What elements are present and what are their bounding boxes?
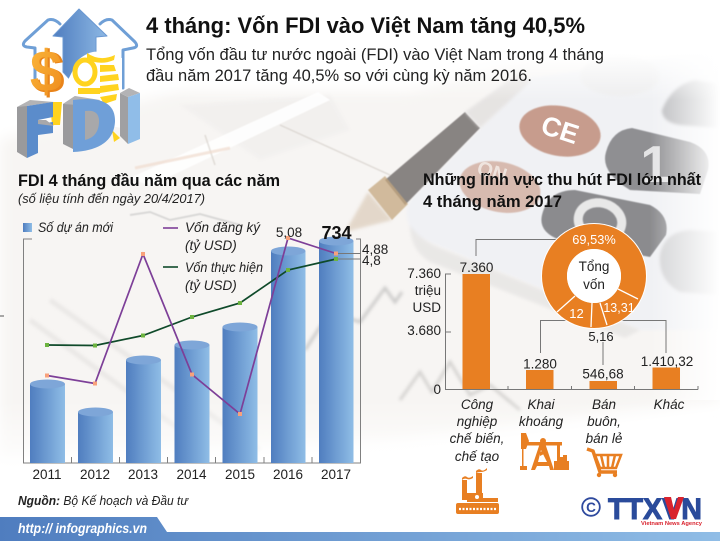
icon: F letter	[17, 100, 54, 158]
x axis labels: 2013	[128, 467, 158, 482]
background photo: calculator, pen and papers: CE	[538, 110, 582, 150]
x axis labels: 2017	[321, 467, 351, 482]
bars	[462, 274, 680, 389]
data labels: 734	[321, 223, 352, 243]
legend: registered capital: (tỷ USD)	[185, 238, 237, 253]
connector lines to end labels	[336, 254, 361, 259]
icon: FDI logo	[17, 9, 140, 158]
legend: registered capital: Vốn đăng ký	[185, 220, 261, 235]
icon: shopping cart	[587, 449, 621, 477]
bar value labels	[460, 260, 693, 382]
donut label: 69,53%: 69,53%	[572, 232, 616, 247]
soft fades	[650, 50, 720, 400]
icon: D letter	[63, 96, 115, 152]
category label: manufacturing: nghiệp	[457, 414, 498, 429]
footer URL: http:// infographics.vn	[18, 521, 147, 536]
icon: oil pump	[520, 433, 569, 470]
y axis labels: 3.680	[407, 323, 441, 338]
intro text: đầu năm 2017 tăng 40,5% so với cùng kỳ năm 2016.	[146, 66, 532, 85]
background: calculator body	[407, 50, 720, 330]
source note: Nguồn: Bộ Kế hoạch và Đầu tư	[18, 493, 189, 508]
icon: I letter	[120, 88, 140, 144]
y axis labels: 0	[433, 382, 441, 397]
line: implemented capital	[45, 257, 338, 348]
category label: retail: bán lẻ	[586, 431, 622, 446]
legend: registered capital	[163, 220, 261, 253]
bars: new projects	[30, 236, 354, 463]
legend: left chart	[23, 220, 263, 293]
data labels	[276, 223, 388, 268]
background: chart traces	[400, 362, 520, 410]
data labels: 5,08	[276, 225, 302, 240]
chart axes	[24, 239, 360, 463]
icon: copyright mark: C	[586, 500, 596, 515]
heading: left chart	[18, 171, 280, 206]
donut label: 13,31: 13,31	[603, 301, 635, 315]
donut label: 5,16: 5,16	[588, 329, 614, 344]
title: 4 tháng: Vốn FDI vào Việt Nam tăng 40,5%	[146, 13, 585, 38]
data labels: 4,8	[362, 253, 381, 268]
legend: implemented capital: Vốn thực hiện	[185, 260, 263, 275]
bar value labels: 546,68	[582, 366, 624, 382]
bar value labels: 7.360	[460, 260, 493, 275]
category label: mining: Khai	[527, 397, 556, 412]
bar value labels: 1.410,32	[641, 354, 693, 369]
background: pen	[385, 112, 480, 205]
logo: TTXVN: Vietnam News Agency	[641, 521, 703, 527]
category label: manufacturing: chế tạo	[455, 449, 500, 464]
icon: factory	[456, 468, 499, 514]
background: keys	[515, 99, 605, 163]
donut chart: share of total capital	[541, 223, 647, 329]
category label: retail: buôn,	[587, 414, 621, 429]
bar chart: capital by sector	[407, 260, 698, 397]
legend: implemented capital: (tỷ USD)	[185, 278, 237, 293]
donut centre label	[579, 259, 609, 292]
x axis labels: 2016	[273, 467, 303, 482]
background photo: calculator, pen and papers: 1	[641, 136, 669, 194]
icon: gold coin stack	[50, 52, 122, 142]
donut centre label: Tổng	[579, 259, 609, 274]
category label: mining: khoáng	[519, 414, 564, 429]
heading: left chart: FDI 4 tháng đầu năm qua các năm	[18, 171, 280, 190]
x axis labels: 2014	[176, 467, 207, 482]
icon: dollar sign: $	[30, 39, 62, 104]
combo chart: FDI by year	[24, 223, 388, 482]
bar value labels: 1.280	[523, 356, 557, 372]
donut centre label: vốn	[583, 277, 605, 292]
heading: right chart: Những lĩnh vực thu hút FDI lớn nhất	[423, 170, 701, 189]
line: registered capital	[45, 236, 338, 416]
category label: manufacturing	[450, 397, 504, 464]
y axis labels: triệu	[415, 283, 441, 298]
footer bar	[0, 517, 720, 541]
icon: outlined side arrows	[23, 20, 137, 88]
category label: manufacturing: chế biến,	[450, 431, 504, 446]
intro text: Tổng vốn đầu tư nước ngoài (FDI) vào Việt Nam trong 4 tháng	[146, 45, 604, 64]
intro text	[146, 45, 604, 85]
data labels: 4,88	[362, 242, 388, 257]
category label: retail: Bán	[592, 397, 616, 412]
heading: right chart: 4 tháng năm 2017	[423, 192, 562, 211]
icon: central up arrow	[53, 9, 107, 88]
heading: right chart	[423, 170, 701, 211]
donut label: 12: 12	[569, 306, 584, 321]
x axis labels: 2015	[225, 467, 255, 482]
x axis labels: 2012	[80, 467, 110, 482]
icon: dollar sign: $	[31, 39, 65, 106]
category label: mining	[519, 397, 564, 429]
legend: implemented capital	[163, 260, 263, 293]
category label: manufacturing: Công	[461, 397, 494, 412]
icon: copyright mark	[582, 498, 600, 516]
x axis labels	[32, 467, 351, 482]
heading: left chart: (số liệu tính đến ngày 20/4/2017)	[18, 191, 205, 206]
y axis labels: USD	[412, 300, 441, 315]
background photo: calculator, pen and papers: ON	[474, 157, 510, 187]
y axis labels: 7.360	[407, 266, 441, 281]
category label: other: Khác	[654, 397, 685, 412]
legend: new projects: Số dự án mới	[38, 220, 114, 235]
chart axes	[446, 274, 698, 390]
category label: retail	[586, 397, 622, 446]
background: paper	[0, 60, 720, 460]
y axis labels	[407, 266, 441, 397]
connector lines: donut to bars	[476, 240, 666, 365]
logo: TTXVN: TTXVN	[608, 493, 702, 526]
x axis labels: 2011	[32, 467, 62, 482]
